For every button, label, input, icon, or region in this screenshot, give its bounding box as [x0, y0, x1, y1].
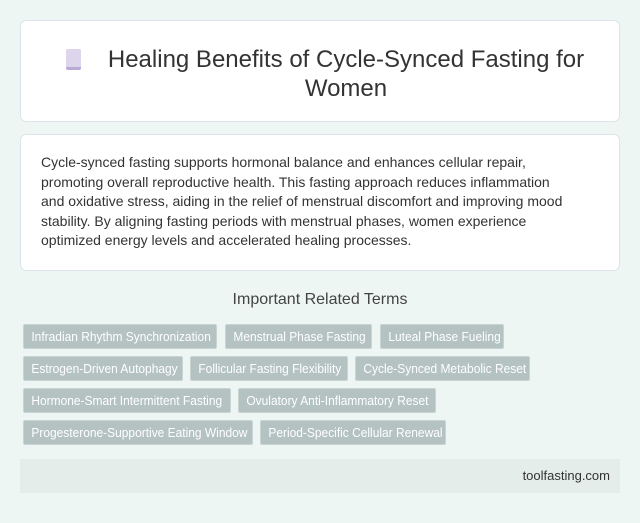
description card: [20, 134, 620, 271]
footer: toolfasting.com: [523, 468, 610, 483]
tag: [380, 324, 504, 349]
tag: Follicular Fasting Flexibility: [198, 361, 341, 376]
tag: Period-Specific Cellular Renewal: [268, 425, 443, 440]
tag: [23, 420, 253, 445]
footer: [20, 459, 620, 493]
tag: Ovulatory Anti-Inflammatory Reset: [246, 393, 428, 408]
tag: Progesterone-Supportive Eating Window: [31, 425, 247, 440]
terms heading: Important Related Terms: [233, 291, 407, 308]
tag: [355, 356, 530, 381]
icon: document: [66, 49, 81, 70]
tag: [23, 388, 231, 413]
tag: Estrogen-Driven Autophagy: [31, 361, 178, 376]
tag: Menstrual Phase Fasting: [233, 329, 366, 344]
tag: Luteal Phase Fueling: [388, 329, 501, 344]
tag: [190, 356, 348, 381]
tag: [23, 324, 217, 349]
tag: Infradian Rhythm Synchronization: [31, 329, 211, 344]
title: Healing Benefits of Cycle-Synced Fasting for Women: [108, 46, 584, 102]
header card: [20, 20, 620, 122]
tag: [23, 356, 183, 381]
tag: [225, 324, 372, 349]
tag: Cycle-Synced Metabolic Reset: [363, 361, 526, 376]
tag: Hormone-Smart Intermittent Fasting: [31, 393, 222, 408]
description card: Cycle-synced fasting supports hormonal balance and enhances cellular repair, promoting overall reproductive health. This fasting approach reduces inflammation and oxidative stress, aiding in the relief of menstrual discomfort and improving mood stability. By aligning fasting periods with menstrual phases, women experience optimized energy levels and accelerated healing processes.: [41, 154, 562, 248]
tag: [260, 420, 446, 445]
tag: [238, 388, 436, 413]
